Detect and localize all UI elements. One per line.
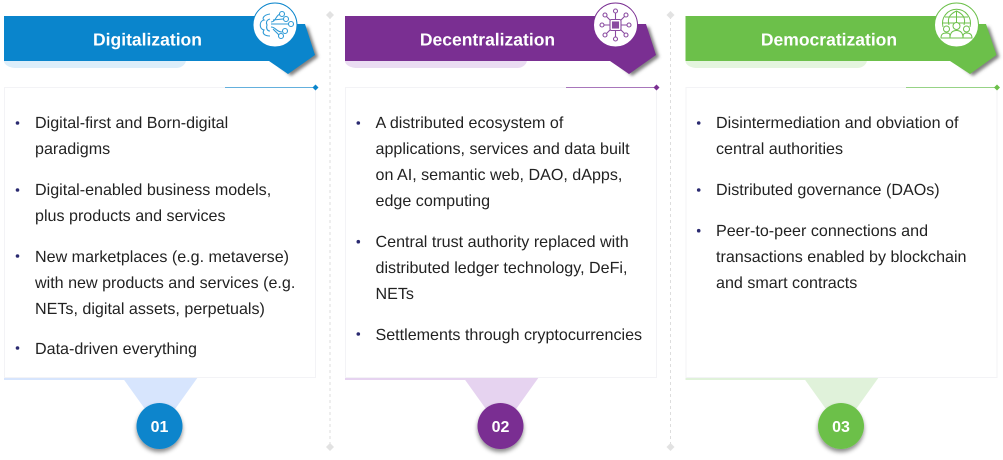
card background 01 bbox=[4, 88, 316, 380]
bullet list 01: Data-driven everything bbox=[35, 340, 197, 358]
header tab 01 bbox=[4, 60, 186, 68]
accent line 02 bbox=[566, 84, 660, 90]
bullet list 02: on AI, semantic web, DAO, dApps, bbox=[376, 166, 622, 184]
card background 02 bbox=[345, 88, 656, 380]
number badge 01 bbox=[136, 403, 182, 449]
header banner 02 bbox=[345, 16, 656, 74]
bullet list 02: Settlements through cryptocurrencies bbox=[376, 326, 642, 344]
icon: decentralized chip network bbox=[594, 3, 638, 47]
bullet list 02: NETs bbox=[376, 285, 414, 303]
bullet list 03: Disintermediation and obviation of bbox=[716, 114, 959, 132]
bullet list 03: central authorities bbox=[716, 140, 843, 158]
bullet list 02 bbox=[356, 114, 642, 344]
panel: decentralization bbox=[345, 3, 660, 449]
number badge 03: 03 bbox=[832, 419, 850, 436]
bullet list 02: A distributed ecosystem of bbox=[376, 114, 564, 132]
bullet list 02: applications, services and data built bbox=[376, 140, 630, 158]
header tab 03 bbox=[686, 60, 867, 68]
callout pointer 02 bbox=[463, 377, 539, 430]
number badge 03 bbox=[818, 403, 864, 449]
panel: democratization bbox=[686, 3, 1000, 449]
bullet list 03 bbox=[697, 114, 967, 292]
panel: digitalization bbox=[4, 3, 318, 449]
accent line 03 bbox=[906, 84, 1000, 90]
bullet list 02: Central trust authority replaced with bbox=[376, 233, 629, 251]
bullet list 03: Peer-to-peer connections and bbox=[716, 222, 928, 240]
bullet list 03: Distributed governance (DAOs) bbox=[716, 181, 940, 199]
card background 03 bbox=[686, 88, 997, 380]
bullet list 01: paradigms bbox=[35, 140, 110, 158]
heading 02: Decentralization bbox=[420, 30, 555, 50]
bullet list 01 bbox=[16, 114, 295, 358]
callout pointer 03 bbox=[803, 377, 879, 430]
bullet list 03: and smart contracts bbox=[716, 274, 857, 292]
bullet list 02: edge computing bbox=[376, 192, 490, 210]
header banner 01 bbox=[4, 16, 315, 74]
icon: globe with people bbox=[934, 3, 978, 47]
bullet list 01: Digital-first and Born-digital bbox=[35, 114, 228, 132]
header banner 03 bbox=[686, 16, 996, 74]
number badge 02 bbox=[478, 403, 524, 449]
bullet list 01: Digital-enabled business models, bbox=[35, 181, 271, 199]
callout pointer 01 bbox=[122, 377, 198, 430]
bullet list 03: transactions enabled by blockchain bbox=[716, 248, 967, 266]
bullet list 01: NETs, digital assets, perpetuals) bbox=[35, 300, 265, 318]
bullet list 01: with new products and services (e.g. bbox=[34, 274, 295, 292]
icon: digital circuit bbox=[253, 3, 297, 47]
banner fold shadow 03 bbox=[961, 27, 1000, 76]
divider: second dashed separator bbox=[666, 11, 674, 451]
bullet list 01: New marketplaces (e.g. metaverse) bbox=[35, 248, 289, 266]
heading 01: Digitalization bbox=[93, 30, 202, 50]
accent line 01 bbox=[225, 84, 318, 90]
header tab 02 bbox=[345, 60, 527, 68]
number badge 02: 02 bbox=[492, 419, 510, 436]
banner fold shadow 01 bbox=[280, 27, 318, 76]
banner fold shadow 02 bbox=[621, 27, 659, 76]
heading 03: Democratization bbox=[761, 30, 897, 50]
divider: first dashed separator bbox=[326, 11, 334, 451]
bullet list 01: plus products and services bbox=[35, 207, 226, 225]
bullet list 02: distributed ledger technology, DeFi, bbox=[376, 259, 627, 277]
number badge 01: 01 bbox=[151, 419, 168, 436]
